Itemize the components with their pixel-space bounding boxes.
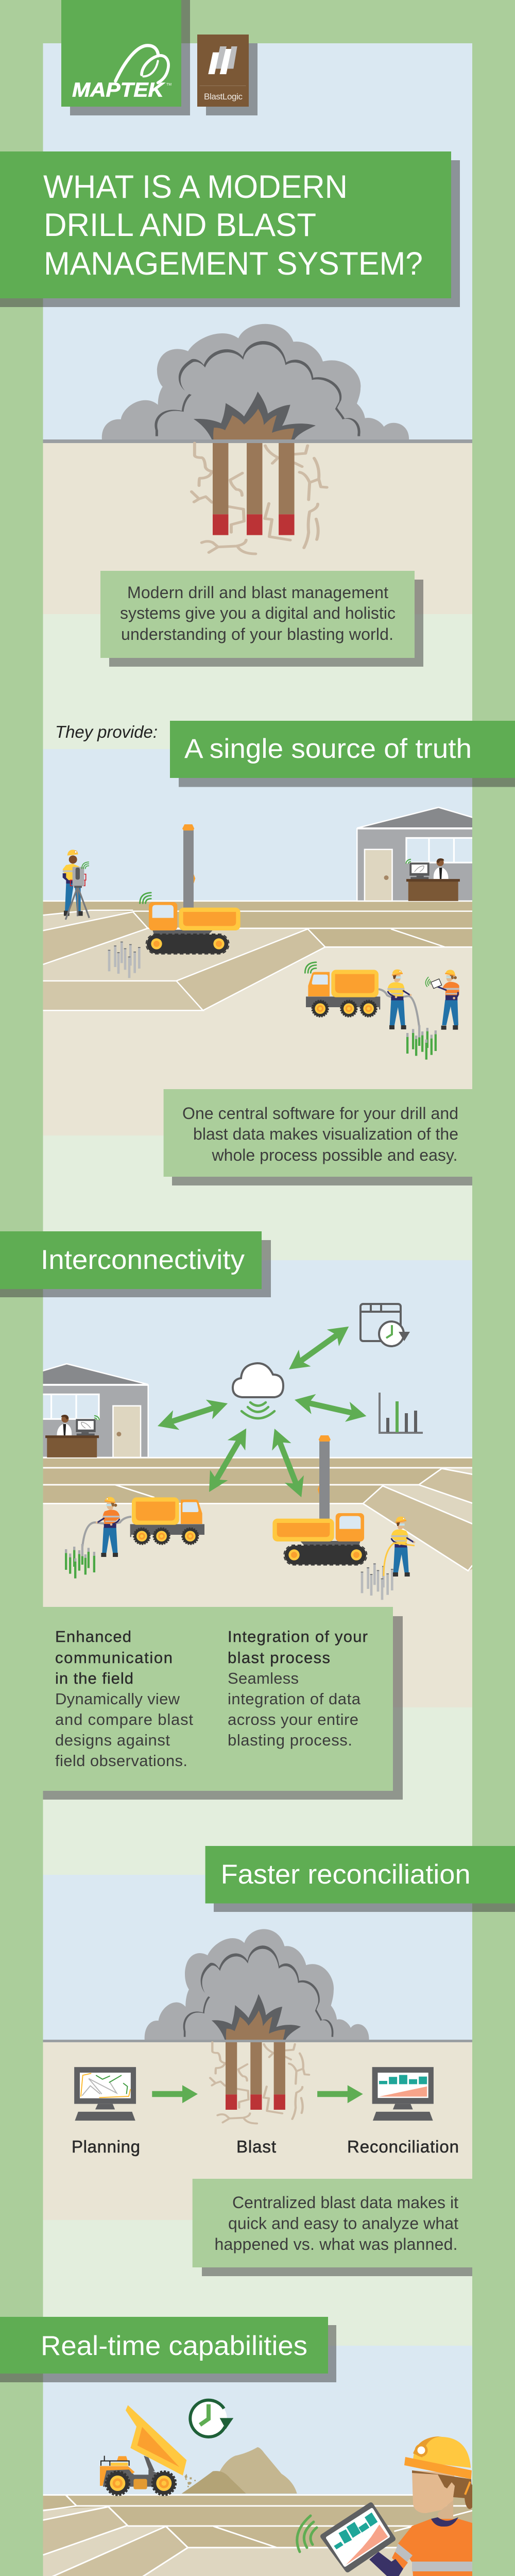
They provide label: They provide: — [55, 722, 158, 741]
icon: cloud with signal — [233, 1363, 283, 1418]
title banner — [0, 151, 460, 307]
text box: single source: One central software for your drill and — [182, 1104, 458, 1123]
blast holes and cracks — [192, 443, 327, 554]
arrow: cloud to schedule — [289, 1326, 349, 1369]
arrow: cloud to truck — [209, 1428, 246, 1492]
logo: BlastLogic top — [197, 35, 258, 115]
column: integration — [228, 1628, 368, 1749]
column: enhanced communication: communication — [55, 1649, 173, 1667]
column: enhanced communication: in the field — [55, 1669, 133, 1687]
column: integration: blasting process. — [228, 1731, 352, 1749]
intro text box — [100, 571, 423, 667]
column: integration: Integration of your — [228, 1628, 368, 1646]
text box: reconciliation — [193, 2179, 490, 2276]
column: integration: Seamless — [228, 1669, 299, 1687]
arrow: blast to reconciliation — [317, 2085, 363, 2103]
icon: schedule calendar and clock — [360, 1304, 410, 1346]
logo: Maptek top — [61, 0, 190, 115]
heading: faster reconciliation: Faster reconciliation — [221, 1859, 471, 1890]
panel: single source of truth scene — [43, 749, 475, 1136]
column: enhanced communication: Enhanced — [55, 1628, 131, 1646]
heading: interconnectivity: Interconnectivity — [41, 1245, 245, 1275]
hose mirrored — [82, 1517, 131, 1547]
text box: interconnectivity — [43, 1607, 403, 1800]
worker close-up — [323, 2436, 475, 2576]
blast holes and cracks — [210, 2042, 309, 2124]
arrow: planning to blast — [152, 2085, 198, 2103]
column: integration: across your entire — [228, 1710, 358, 1728]
column: enhanced communication: and compare blast — [55, 1710, 193, 1728]
arrow: cloud to chart — [295, 1394, 367, 1422]
icon: bar chart — [380, 1393, 423, 1433]
building: control office — [357, 807, 475, 901]
label: blast: Blast — [236, 2137, 276, 2156]
text box: reconciliation: Centralized blast data makes it — [232, 2193, 458, 2212]
label: planning: Planning — [72, 2137, 140, 2156]
logo: BlastLogic top: BlastLogic — [204, 92, 243, 101]
hills of blasted rock — [182, 2447, 297, 2494]
text box: single source — [164, 1089, 483, 1185]
title banner: MANAGEMENT SYSTEM? — [44, 246, 423, 282]
surveyor with scanner — [63, 850, 89, 920]
drill holes gray — [361, 1564, 393, 1600]
column: enhanced communication — [55, 1628, 193, 1770]
label: reconciliation: Reconciliation — [347, 2137, 459, 2156]
building: control office mirrored — [30, 1364, 148, 1458]
detonator lead — [384, 1543, 415, 1576]
loading truck — [305, 962, 380, 1017]
text box: reconciliation: happened vs. what was planned. — [214, 2235, 457, 2253]
title banner: DRILL AND BLAST — [44, 207, 316, 243]
dump truck — [100, 2405, 196, 2495]
logo: Maptek top: MAPTEK — [72, 79, 165, 101]
column: enhanced communication: designs against — [55, 1731, 170, 1749]
drill holes gray — [108, 942, 141, 978]
heading: single source of truth — [170, 721, 515, 787]
arrow: cloud to rig — [272, 1429, 304, 1497]
intro text box: understanding of your blasting world. — [121, 625, 393, 643]
drill rig mirrored — [272, 1435, 367, 1565]
title text: WHAT IS A MODERN — [43, 169, 348, 205]
column: integration: integration of data — [228, 1690, 361, 1708]
heading: real-time capabilities — [0, 2317, 336, 2382]
text box: reconciliation: quick and easy to analyze what — [228, 2214, 458, 2233]
charged holes green — [406, 1025, 437, 1060]
heading: interconnectivity — [0, 1231, 271, 1297]
icon: wifi near tablet — [297, 2516, 317, 2552]
heading: single source of truth: A single source of truth — [184, 734, 472, 764]
loading truck mirrored — [130, 1497, 204, 1545]
logo: Maptek top: TM — [166, 83, 171, 87]
hose — [379, 989, 419, 1027]
icon: real-time clock — [190, 2400, 233, 2437]
panel: real-time scene — [43, 2346, 475, 2576]
worker yellow with lead — [391, 1517, 415, 1577]
charged holes green — [65, 1544, 95, 1579]
drill rig — [140, 824, 241, 954]
panel: intro scene — [43, 43, 472, 614]
panel: interconnectivity scene — [30, 1260, 472, 1707]
explosion cloud — [145, 1929, 369, 2040]
text box: single source: whole process possible and easy. — [211, 1146, 457, 1164]
column: integration: blast process — [228, 1649, 330, 1667]
tablet — [323, 2505, 393, 2570]
heading: real-time capabilities: Real-time capabilities — [41, 2331, 307, 2361]
explosion cloud — [102, 324, 409, 439]
icon: reconciliation monitor — [372, 2067, 434, 2121]
intro text box: systems give you a digital and holistic — [120, 604, 396, 622]
column: enhanced communication: field observations. — [55, 1752, 187, 1770]
text box: single source: blast data makes visualization of the — [193, 1125, 458, 1143]
worker with tablet — [425, 970, 459, 1030]
intro text box: Modern drill and blast management — [127, 583, 388, 602]
icon: planning monitor — [74, 2067, 136, 2121]
worker with hose — [387, 970, 411, 1029]
heading: faster reconciliation — [205, 1846, 515, 1912]
column: enhanced communication: Dynamically view — [55, 1690, 180, 1708]
panel: faster reconciliation scene — [43, 1875, 472, 2220]
arrow: cloud to office — [158, 1399, 228, 1430]
worker orange with hose — [96, 1497, 120, 1557]
